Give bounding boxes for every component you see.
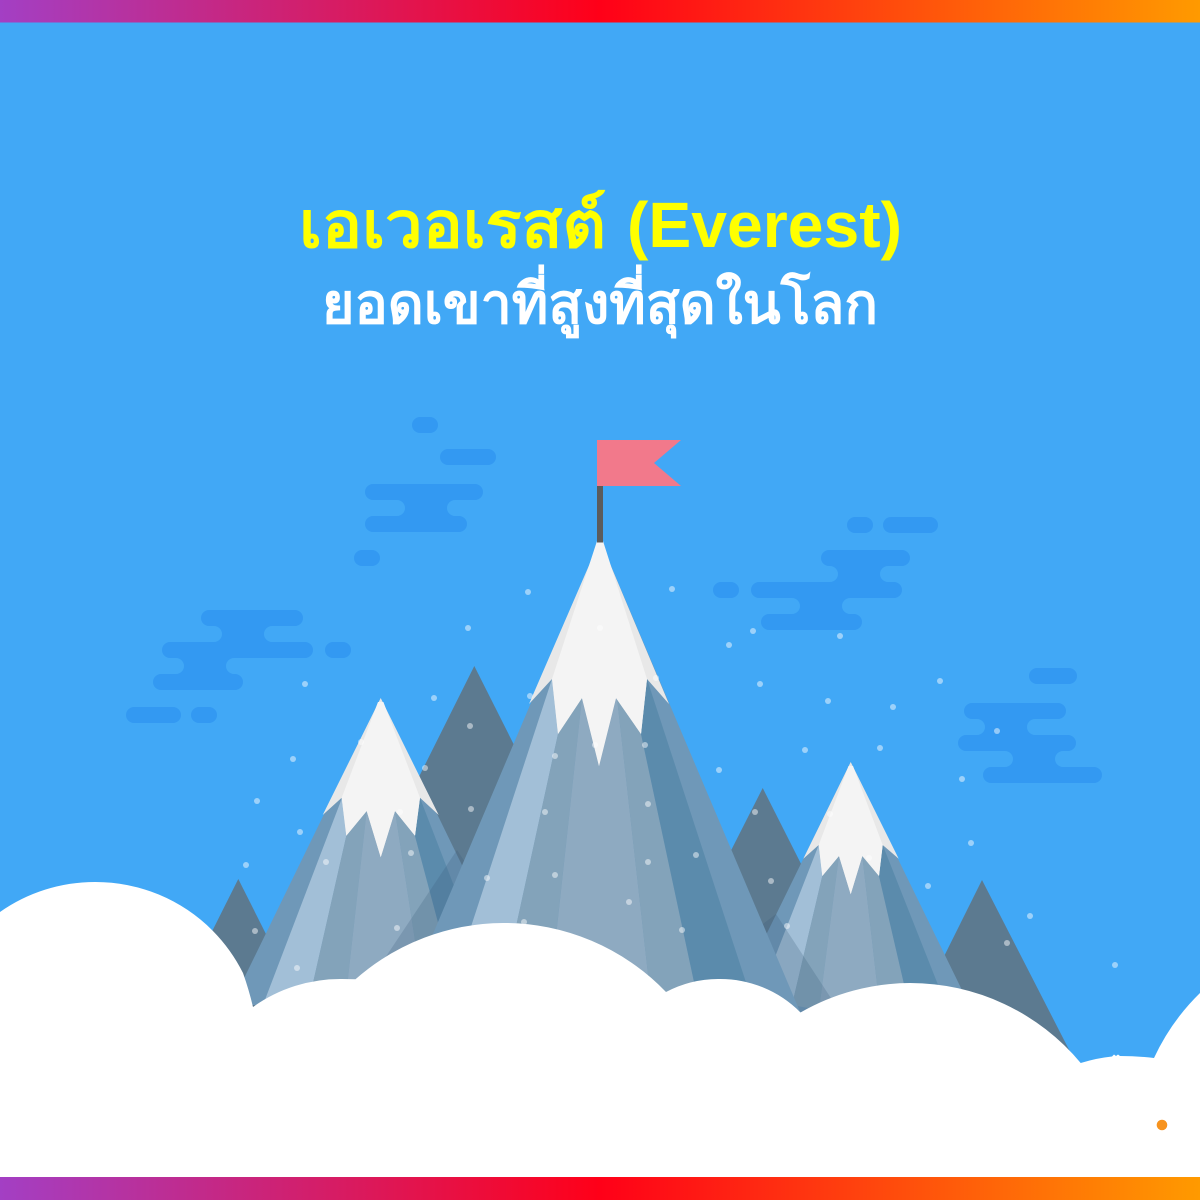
- flag on the summit: [597, 440, 681, 542]
- background clouds: [126, 417, 1102, 783]
- foreground white clouds: [0, 882, 1200, 1178]
- title: [299, 189, 902, 339]
- top gradient bar: [0, 0, 1200, 22]
- left mountain snow: [323, 698, 439, 857]
- flag cloth: [597, 440, 681, 486]
- bottom gradient bar: [0, 1177, 1200, 1200]
- main mountain snow: [529, 540, 669, 766]
- snowfall dots: [243, 586, 1118, 971]
- orange dot: [1157, 1120, 1167, 1130]
- right mountain: [700, 762, 1001, 1070]
- title line 2: ยอดเขาที่สูงที่สุดในโลก: [322, 264, 878, 339]
- cloud: upper centre: [354, 417, 496, 566]
- cloud: right: [958, 668, 1102, 783]
- title line 1: เอเวอเรสต์: [299, 189, 606, 261]
- left mountain: [231, 698, 530, 1005]
- cloud: upper right: [713, 517, 938, 630]
- title line 1: (Everest): [627, 189, 902, 261]
- right mountain snow: [803, 762, 899, 894]
- cloud: left: [126, 610, 351, 723]
- title line 1: [299, 189, 902, 261]
- main mountain: [385, 540, 815, 1047]
- flag pole: [597, 486, 603, 542]
- distant dark mountains: [130, 666, 1082, 1095]
